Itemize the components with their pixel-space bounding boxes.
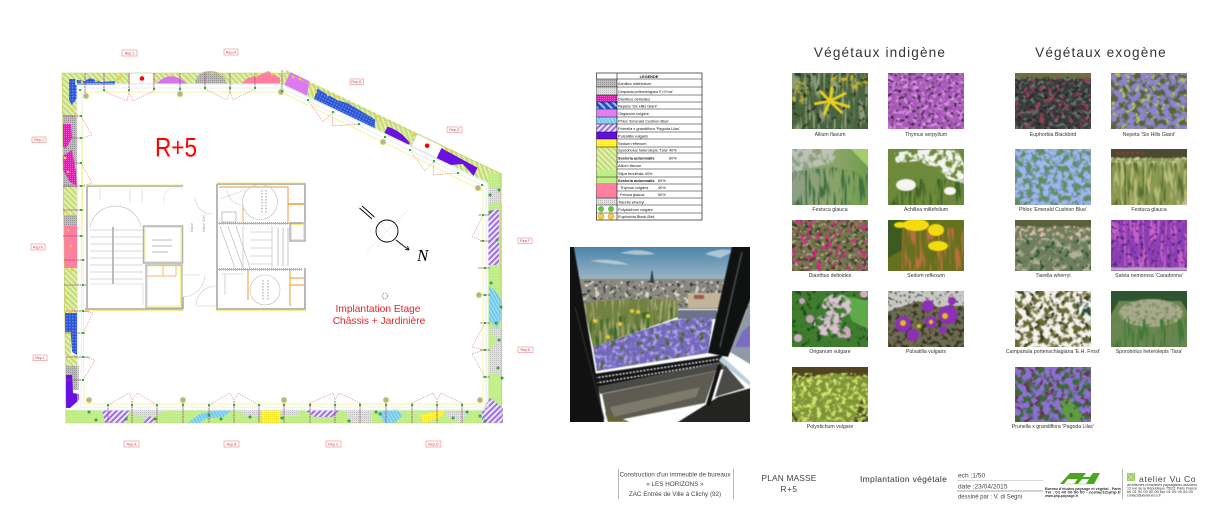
plant: Phlox Emerald Cushion Blue: Phlox 'Emerald Cushion Blue' <box>1019 207 1087 213</box>
section tags: Rep.F <box>520 239 531 243</box>
legend table <box>596 73 702 220</box>
legend labels: Prunella x grandiflora 'Pagoda Lilac' <box>618 126 680 131</box>
plant: Festuca: Festuca glauca <box>812 207 848 213</box>
heading: exotic plants: Végétaux exogène <box>1035 45 1167 60</box>
heading: native plants: Végétaux indigène <box>814 45 946 60</box>
legend labels: Euphorbia Black Bird <box>618 214 654 219</box>
drawing data: dessiné par : V. di Segni <box>958 494 1022 500</box>
planter: sloped strip <box>280 70 500 186</box>
logo atelier Vu Co: tél 01 00 00 00 00 fax 01 00 00 00 00 <box>1127 490 1193 494</box>
plant: Thymus serpyllum: Thymus serpyllum <box>905 132 947 138</box>
plant: Prunella Pagoda: Prunella x grandiflora 'Pagoda Lilac' <box>1012 424 1094 430</box>
building core: right block <box>196 183 305 310</box>
section tags: Rep.G <box>449 128 460 132</box>
legend labels: Tiarella wherryi <box>618 200 644 204</box>
legend labels: Origanum vulgare <box>618 111 649 116</box>
section tags: Rep.B <box>226 442 237 446</box>
logo PHP: www.php-paysage.fr <box>1044 494 1079 498</box>
section tags: Rep.E <box>520 348 531 352</box>
section tags: Rep.J <box>34 138 44 142</box>
implantation note: Implantation Etage <box>336 304 421 315</box>
legend labels: Thymus vulgaris <box>620 185 648 190</box>
project name <box>618 469 734 499</box>
plant: Origanum vulgare <box>788 287 872 355</box>
plant: Allium flavum: Allium flavum <box>815 132 845 138</box>
section tags: Rep.G <box>351 80 362 84</box>
plant: Salvia nemorosa: Salvia nemorosa 'Caradonna' <box>1115 273 1183 279</box>
section tags: Rep.A <box>126 442 137 446</box>
plant: Polystichum <box>788 363 872 430</box>
plant: Festuca clump <box>1107 145 1191 213</box>
grey columns <box>83 89 483 403</box>
plant: Prunella Pagoda <box>1011 363 1095 430</box>
section tags: Rep.C <box>328 442 339 446</box>
green chassis markers <box>80 88 485 405</box>
implantation note: Châssis + Jardinière <box>333 316 426 327</box>
logo atelier Vu Co: architectes urbanistes paysagistes associés <box>1127 483 1197 487</box>
section tags: Rep.L <box>35 356 45 360</box>
section tags <box>31 49 533 447</box>
legend labels <box>618 74 680 219</box>
drawing name <box>761 473 817 494</box>
building core: left block <box>83 185 212 310</box>
legend labels: Sporobolus heterolepis 'Tara' 40% <box>618 148 677 152</box>
legend labels: Pulsatilla vulgaris <box>618 134 648 138</box>
drawing data <box>957 472 1043 500</box>
plant: Origanum vulgare: Origanum vulgare <box>809 349 851 355</box>
compass <box>360 206 430 265</box>
legend labels: Campanula portenschlagiana 'E.H Frost' <box>618 89 673 94</box>
legend labels: 60% <box>669 156 677 160</box>
implantation note <box>333 304 426 327</box>
legend swatches <box>596 79 617 220</box>
plant: Dianthus deltoides <box>788 216 872 279</box>
plant: Festuca <box>788 145 872 213</box>
plant: Tiarella wherryi: Tiarella wherryi <box>1036 273 1070 279</box>
section tags: Rep.H <box>226 50 236 54</box>
plant: Campanula E.H. Frost <box>1006 287 1100 355</box>
service label <box>190 215 206 232</box>
plant: Euphorbia Blackbird <box>1011 69 1095 138</box>
plant: Allium flavum <box>788 69 874 138</box>
plant: Nepeta Six Hills Giant <box>1107 69 1191 138</box>
legend labels: Dianthus deltoides <box>618 96 650 102</box>
project name: Construction d'un immeuble de bureaux <box>619 472 731 478</box>
legend labels: Sesleria autumnalis <box>618 156 655 160</box>
planter dividers <box>63 70 490 423</box>
plant: Thymus serpyllum <box>884 69 968 138</box>
service label: Gaine <box>190 223 194 232</box>
plant: Pulsatilla vulgaris: Pulsatilla vulgaris <box>906 349 946 355</box>
planter: right strip <box>488 173 502 410</box>
drawing name: PLAN MASSE <box>761 473 817 483</box>
legend labels: 40% <box>658 185 666 190</box>
legend labels: Phlox 'Emerald Cushion Blue' <box>618 118 669 124</box>
legend labels: Stipa tenuifolia 40% <box>618 171 653 176</box>
plant: Sporobolus heterolepis <box>1107 287 1191 355</box>
compass: N <box>416 246 430 265</box>
section tags: Rep.D <box>428 442 439 446</box>
photo: window view over planter and Paris <box>570 247 750 422</box>
plant: Sedum reflexum: Sedum reflexum <box>907 273 945 279</box>
plant: Salvia nemorosa <box>1107 216 1191 279</box>
drawing name: R+5 <box>781 484 797 494</box>
legend labels: 60% <box>658 178 666 183</box>
plant: Achillea millefolium: Achillea millefolium <box>904 207 948 213</box>
section tags: Rep.1 <box>125 52 134 56</box>
legend labels: Allium flavum <box>618 163 641 168</box>
legend labels: LEGENDE <box>640 74 659 79</box>
planter: left strip <box>62 73 79 408</box>
level label R+5: R+5 <box>155 132 197 162</box>
legend labels: Fetuca glauca <box>620 192 645 197</box>
plant: Euphorbia Blackbird: Euphorbia Blackbird <box>1030 132 1076 138</box>
plant: Dianthus deltoides: Dianthus deltoides <box>809 273 852 279</box>
logo atelier Vu Co: atelier Vu Co <box>1139 474 1196 484</box>
service label: Gaine 30x0 <box>202 215 206 232</box>
legend labels: Sesleria autumnalis <box>618 178 655 183</box>
plant: Nepeta Six Hills Giant: Nepeta 'Six Hills Giant' <box>1123 132 1175 138</box>
logo PHP <box>1044 473 1122 498</box>
planter: top strip <box>62 71 286 105</box>
plant: Festuca clump: Festuca glauca <box>1131 207 1167 213</box>
planter: bottom strip <box>66 398 503 423</box>
drawing data: ech :1/50 <box>958 472 985 480</box>
legend labels: Achillea millefolium <box>618 81 651 86</box>
plant: Sedum reflexum <box>884 216 968 279</box>
small level mark <box>382 293 388 299</box>
floor plan R+5 <box>31 49 533 447</box>
window band <box>77 84 488 410</box>
logo atelier Vu Co: contact@ateliervuco.fr <box>1127 494 1162 498</box>
outer outline <box>62 73 502 423</box>
legend labels: Nepeta 'Six Hills Giant' <box>618 104 658 108</box>
plant: Achillea millefolium <box>884 145 968 213</box>
legend labels: Sedum reflexum <box>618 141 646 146</box>
drawing subject: Implantation végétale <box>860 474 947 484</box>
plant: Sporobolus heterolepis: Sporobolus heterolepis 'Tara' <box>1116 349 1182 355</box>
logo PHP: Bureau d'études paysage et végétal - Paris <box>1045 487 1121 491</box>
plant: Phlox Emerald Cushion Blue <box>1011 145 1095 213</box>
green shrub markers <box>89 190 502 421</box>
red dashed door swings <box>81 89 485 405</box>
logo atelier Vu Co: 12 rue de la République 75011 Paris France <box>1127 486 1197 490</box>
project name: ZAC Entrée de Ville à Clichy (92) <box>629 491 721 498</box>
drawing data: date :23/04/2015 <box>958 484 1008 490</box>
section tags: Rep.K <box>33 246 44 250</box>
project name: « LES HORIZONS » <box>646 481 704 488</box>
logo PHP: Tél : 01 40 00 00 00 - contact@php.fr <box>1045 490 1122 494</box>
legend labels: 50% <box>658 192 666 197</box>
title block <box>618 469 1197 500</box>
plant: Polystichum: Polystichum vulgare <box>807 424 853 430</box>
yellow shrub markers <box>65 73 452 312</box>
plant: Pulsatilla vulgaris <box>884 287 968 355</box>
plant: Campanula E.H. Frost: Campanula portenschlagiana 'E.H. Frost' <box>1006 349 1100 355</box>
legend labels: Polystichum vulgare <box>618 207 653 212</box>
logo atelier Vu Co <box>1122 469 1197 499</box>
plant: Tiarella wherryi <box>1011 216 1095 279</box>
